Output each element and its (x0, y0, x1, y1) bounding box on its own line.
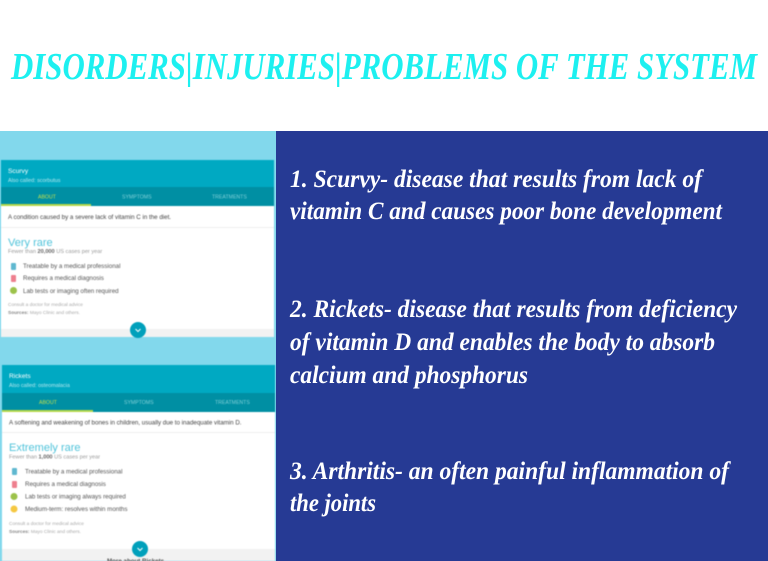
advice note (8, 302, 83, 316)
tabs: SYMPTOMS (122, 194, 152, 200)
tabs (38, 194, 247, 200)
tabs: TREATMENTS (215, 400, 250, 406)
rarity heading: Extremely rare (9, 442, 81, 454)
advice note: Sources: Mayo Clinic and others. (9, 529, 81, 535)
text: rickets: 2. Rickets- disease that results from deficiency (289, 296, 738, 323)
text: arthritis: the joints (290, 490, 376, 517)
list: Requires a medical diagnosis (25, 481, 106, 488)
panel: rickets card: Also called: osteomalacia (9, 383, 70, 389)
list: Requires a medical diagnosis (23, 275, 104, 282)
card heading: Scurvy (8, 168, 29, 175)
rarity heading: Very rare (8, 237, 53, 249)
icon: lab (10, 493, 18, 500)
list: Lab tests or imaging often required (23, 288, 119, 295)
case count: Fewer than 20,000 US cases per year (8, 249, 102, 255)
card heading: Rickets (9, 373, 31, 380)
advice note (9, 521, 84, 535)
description: A softening and weakening of bones in children, usually due to inadequate vitamin D. (9, 420, 242, 426)
panel: scurvy card: Also called: scorbutus (8, 178, 61, 184)
text: arthritis: 3. Arthritis- an often painful inflammation of (289, 458, 732, 485)
text: rickets (289, 296, 738, 389)
text: rickets: calcium and phosphorus (290, 362, 528, 389)
icon: calendar (12, 481, 17, 488)
tabs: ABOUT (39, 400, 58, 406)
text: scurvy: 1. Scurvy- disease that results from lack of (290, 166, 705, 193)
panel: screenshots background (0, 131, 276, 561)
icon: expand button (130, 322, 146, 338)
panel: explanations (276, 131, 768, 561)
tabs: TREATMENTS (212, 194, 247, 200)
icon: calendar (11, 275, 16, 282)
icon: bottle (12, 468, 17, 475)
list (25, 468, 127, 513)
list (23, 263, 120, 295)
text: rickets: of vitamin D and enables the body to absorb (290, 329, 715, 356)
list: Medium-term: resolves within months (25, 506, 127, 513)
panel: scurvy card (1, 160, 274, 338)
icon: lab (10, 287, 17, 294)
icon: clock (10, 506, 18, 512)
panel: rickets card (2, 365, 275, 561)
description: A condition caused by a severe lack of vitamin C in the diet. (8, 214, 171, 221)
icon: bottle (11, 263, 16, 270)
advice note: Sources: Mayo Clinic and others. (8, 310, 80, 316)
icon: expand button (132, 541, 148, 557)
case count: Fewer than 1,000 US cases per year (9, 454, 100, 460)
text: scurvy: vitamin C and causes poor bone development (290, 198, 723, 225)
list: Treatable by a medical professional (23, 263, 120, 270)
tabs (39, 400, 250, 406)
list: Treatable by a medical professional (25, 468, 122, 476)
tabs: SYMPTOMS (124, 400, 154, 406)
text: arthritis (289, 458, 732, 517)
tabs: ABOUT (38, 194, 57, 200)
advice note: Consult a doctor for medical advice (8, 302, 83, 308)
list: Lab tests or imaging always required (25, 494, 126, 500)
text: scurvy (290, 166, 723, 225)
advice note: Consult a doctor for medical advice (9, 521, 84, 527)
